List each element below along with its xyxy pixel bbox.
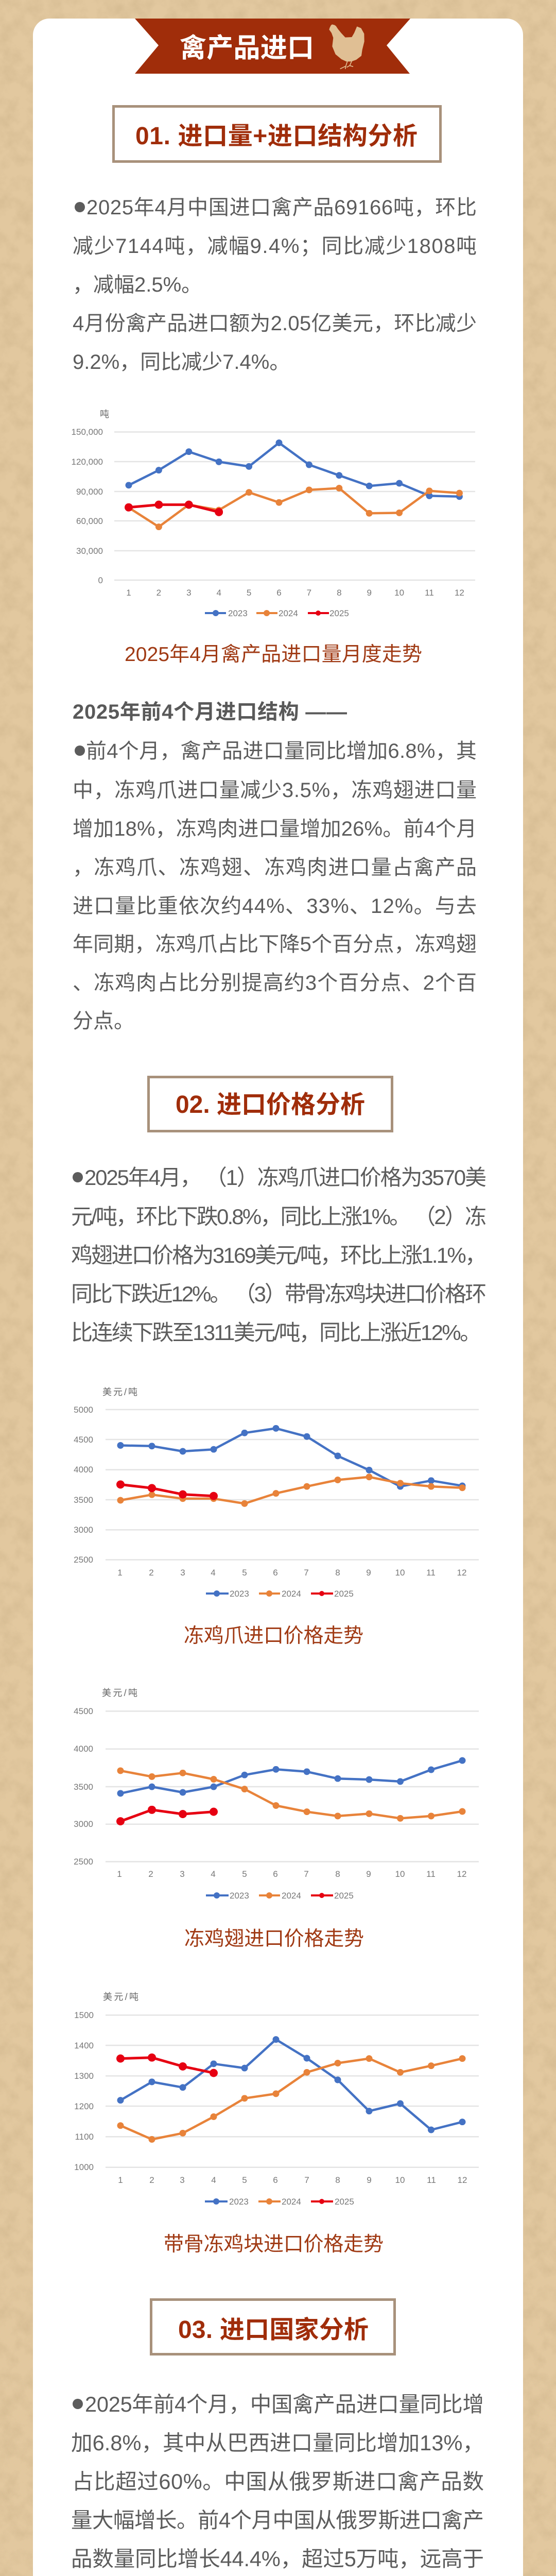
text block: price summary: 比连续下跌至1311美元/吨，同比上涨近12%。	[71, 1320, 481, 1345]
line chart: frozen chicken wing price: 5	[242, 1869, 247, 1879]
text block: import structure: 年同期，冻鸡爪占比下降5个百分点，冻鸡翅	[73, 933, 477, 956]
legend	[205, 608, 349, 618]
line chart: frozen chicken feet price: 2	[149, 1568, 154, 1578]
line chart: frozen chicken wing price: 3000	[74, 1819, 93, 1829]
line chart: monthly import volume: 11	[425, 588, 434, 598]
line chart: bone-in chicken cuts price: 美元/吨	[103, 1992, 138, 2002]
section heading: 03: 03. 进口国家分析	[178, 2316, 369, 2344]
text block: price summary: 鸡翅进口价格为3169美元/吨，环比上涨1.1%，	[71, 1243, 486, 1267]
text block: price summary: 2025年4月， （1）冻鸡爪进口价格为3570美	[84, 1165, 486, 1190]
text block: import structure: 、冻鸡肉占比分别提高约3个百分点、2个百	[73, 972, 477, 994]
line chart: bone-in chicken cuts price	[74, 1992, 479, 2207]
icon: chicken	[329, 24, 364, 69]
line chart: monthly import volume: 90,000	[76, 487, 103, 497]
line chart: frozen chicken wing price: 4000	[74, 1744, 93, 1754]
line chart: frozen chicken wing price: 9	[366, 1869, 371, 1879]
legend: 2024	[282, 1891, 301, 1901]
legend: 2025	[329, 608, 349, 618]
text block: import volume summary: 2025年4月中国进口禽产品69166吨，环比	[86, 196, 477, 219]
legend: 2023	[230, 1589, 249, 1599]
line chart: monthly import volume: 60,000	[76, 516, 103, 526]
line chart: frozen chicken wing price: 6	[273, 1869, 278, 1879]
line chart: monthly import volume: 吨	[100, 409, 109, 419]
line chart: monthly import volume: 12	[455, 588, 464, 598]
line chart: bone-in chicken cuts price: 7	[304, 2175, 309, 2185]
line chart: monthly import volume: 10	[394, 588, 404, 598]
line chart: bone-in chicken cuts price: 12	[458, 2175, 467, 2185]
line chart: frozen chicken wing price: 3500	[74, 1782, 93, 1792]
chart caption: 冻鸡爪进口价格走势	[184, 1625, 363, 1647]
line chart: monthly import volume: 6	[276, 588, 282, 598]
line chart: frozen chicken wing price: 4	[211, 1869, 216, 1879]
line chart: frozen chicken feet price: 2500	[74, 1555, 93, 1565]
text block: import volume summary: 减少7144吨，减幅9.4%；同比减少1808吨	[73, 235, 477, 258]
line chart: frozen chicken wing price: 1	[117, 1869, 122, 1879]
section heading: 02: 02. 进口价格分析	[176, 1091, 365, 1118]
text block: import volume summary: 4月份禽产品进口额为2.05亿美元，环比减少	[73, 312, 477, 335]
text block: price summary	[71, 1165, 486, 1345]
legend: 2023	[229, 2197, 249, 2207]
line chart: frozen chicken feet price: 10	[395, 1568, 405, 1578]
chart caption: 2025年4月禽产品进口量月度走势	[125, 643, 422, 666]
line chart: bone-in chicken cuts price: 1	[118, 2175, 123, 2185]
line chart: monthly import volume: 8	[337, 588, 342, 598]
line chart: frozen chicken wing price: 7	[304, 1869, 309, 1879]
text block: price summary: 元/吨，环比下跌0.8%，同比上涨1%。 （2）冻	[71, 1205, 486, 1229]
legend: 2023	[230, 1891, 249, 1901]
line chart: monthly import volume: 9	[367, 588, 372, 598]
line chart: frozen chicken feet price: 3500	[74, 1495, 93, 1505]
line chart: frozen chicken feet price: 8	[335, 1568, 340, 1578]
line chart: frozen chicken feet price: 4000	[74, 1465, 93, 1475]
text block: import structure: 进口量比重依次约44%、33%、12%。与去	[73, 895, 477, 918]
line chart: frozen chicken feet price: 美元/吨	[102, 1387, 137, 1397]
line chart: monthly import volume: 150,000	[72, 427, 103, 437]
line chart: monthly import volume: 2	[157, 588, 161, 598]
line chart: frozen chicken wing price: 12	[457, 1869, 466, 1879]
text block: import volume summary: 9.2%，同比减少7.4%。	[73, 351, 290, 374]
line chart: bone-in chicken cuts price: 3	[180, 2175, 185, 2185]
line chart: bone-in chicken cuts price: 1000	[74, 2162, 94, 2172]
line chart: frozen chicken wing price: 2500	[74, 1857, 93, 1867]
legend: 2025	[335, 2197, 354, 2207]
line chart: frozen chicken feet price: 5	[242, 1568, 247, 1578]
line chart: bone-in chicken cuts price: 10	[395, 2175, 405, 2185]
legend: 2023	[228, 608, 248, 618]
line chart: frozen chicken feet price: 4	[211, 1568, 216, 1578]
line chart: frozen chicken feet price: 1	[117, 1568, 123, 1578]
line chart: bone-in chicken cuts price: 8	[335, 2175, 340, 2185]
line chart: frozen chicken feet price: 7	[304, 1568, 309, 1578]
section heading: 01: 01. 进口量+进口结构分析	[135, 123, 418, 150]
line chart: frozen chicken wing price: 2	[148, 1869, 153, 1879]
text block: import volume summary: ，减幅2.5%。	[73, 274, 202, 296]
text block: import structure: 分点。	[73, 1010, 134, 1032]
line chart: frozen chicken wing price: 8	[335, 1869, 340, 1879]
line chart: frozen chicken wing price: 11	[426, 1869, 436, 1879]
line chart: bone-in chicken cuts price: 1400	[74, 2041, 94, 2050]
line chart: bone-in chicken cuts price: 2	[149, 2175, 154, 2185]
line chart: frozen chicken feet price: 3000	[74, 1525, 93, 1535]
subheading: import structure: 2025年前4个月进口结构 ——	[73, 701, 347, 723]
text block: source countries: 加6.8%，其中从巴西进口量同比增加13%，	[71, 2431, 484, 2455]
line chart: bone-in chicken cuts price: 11	[427, 2175, 436, 2185]
text block: source countries	[71, 2392, 484, 2576]
text block: import volume summary	[73, 196, 477, 374]
line chart: bone-in chicken cuts price: 1100	[75, 2132, 94, 2142]
line chart: bone-in chicken cuts price: 9	[367, 2175, 372, 2185]
line chart: frozen chicken wing price: 4500	[74, 1706, 93, 1716]
line chart: monthly import volume: 5	[247, 588, 251, 598]
line chart: monthly import volume: 1	[126, 588, 131, 598]
line chart: frozen chicken feet price: 11	[426, 1568, 436, 1578]
line chart: bone-in chicken cuts price: 1300	[74, 2071, 94, 2081]
legend	[206, 1891, 354, 1901]
text block: import structure: 增加18%，冻鸡肉进口量增加26%。前4个月	[73, 818, 477, 840]
chart caption: 冻鸡翅进口价格走势	[184, 1928, 364, 1950]
line chart: frozen chicken feet price: 5000	[74, 1405, 93, 1415]
line chart: frozen chicken feet price: 12	[457, 1568, 466, 1578]
legend: 2025	[334, 1589, 354, 1599]
line chart: frozen chicken feet price: 3	[180, 1568, 185, 1578]
line chart: frozen chicken feet price: 4500	[74, 1435, 93, 1445]
line chart: frozen chicken feet price: 9	[366, 1568, 371, 1578]
text block: import structure: 中，冻鸡爪进口量减少3.5%，冻鸡翅进口量	[73, 779, 477, 802]
text block: import structure	[73, 740, 477, 1032]
chart caption: 带骨冻鸡块进口价格走势	[164, 2233, 384, 2256]
text block: source countries: 品数量同比增长44.4%，超过5万吨，远高于	[71, 2547, 484, 2571]
line chart: frozen chicken feet price: 6	[273, 1568, 278, 1578]
legend: 2024	[282, 2197, 301, 2207]
title: 禽产品进口	[180, 33, 314, 63]
line chart: frozen chicken wing price: 美元/吨	[102, 1688, 137, 1698]
line chart: bone-in chicken cuts price: 1200	[74, 2102, 94, 2111]
text block: import structure: 前4个月，禽产品进口量同比增加6.8%，其	[86, 740, 477, 762]
banner: title ribbon	[135, 19, 410, 74]
line chart: monthly import volume: 4	[216, 588, 221, 598]
line chart: monthly import volume: 0	[98, 575, 103, 585]
text block: source countries: 2025年前4个月，中国禽产品进口量同比增	[85, 2392, 484, 2416]
line chart: frozen chicken feet price	[74, 1387, 479, 1599]
line chart: bone-in chicken cuts price: 1500	[74, 2010, 94, 2020]
line chart: frozen chicken wing price: 3	[180, 1869, 185, 1879]
legend: 2024	[279, 608, 298, 618]
line chart: monthly import volume: 120,000	[72, 457, 103, 467]
line chart: bone-in chicken cuts price: 6	[273, 2175, 278, 2185]
line chart: monthly import volume: 3	[186, 588, 192, 598]
text block: source countries: 量大幅增长。前4个月中国从俄罗斯进口禽产	[71, 2508, 484, 2532]
text block: source countries: 占比超过60%。中国从俄罗斯进口禽产品数	[72, 2469, 484, 2494]
legend: 2024	[282, 1589, 301, 1599]
text block: import structure: ，冻鸡爪、冻鸡翅、冻鸡肉进口量占禽产品	[73, 856, 477, 879]
line chart: monthly import volume: 30,000	[76, 546, 103, 556]
legend: 2025	[334, 1891, 354, 1901]
line chart: frozen chicken wing price: 10	[395, 1869, 405, 1879]
line chart: bone-in chicken cuts price: 4	[211, 2175, 216, 2185]
line chart: monthly import volume	[72, 409, 475, 618]
legend	[206, 1589, 354, 1599]
section heading: 01	[113, 106, 441, 162]
section heading: 02	[148, 1077, 392, 1131]
line chart: monthly import volume: 7	[307, 588, 311, 598]
line chart: frozen chicken wing price	[74, 1688, 479, 1901]
line chart: bone-in chicken cuts price: 5	[242, 2175, 247, 2185]
text block: price summary: 同比下跌近12%。 （3）带骨冻鸡块进口价格环	[71, 1282, 486, 1306]
legend	[205, 2197, 354, 2207]
section heading: 03	[151, 2300, 394, 2354]
